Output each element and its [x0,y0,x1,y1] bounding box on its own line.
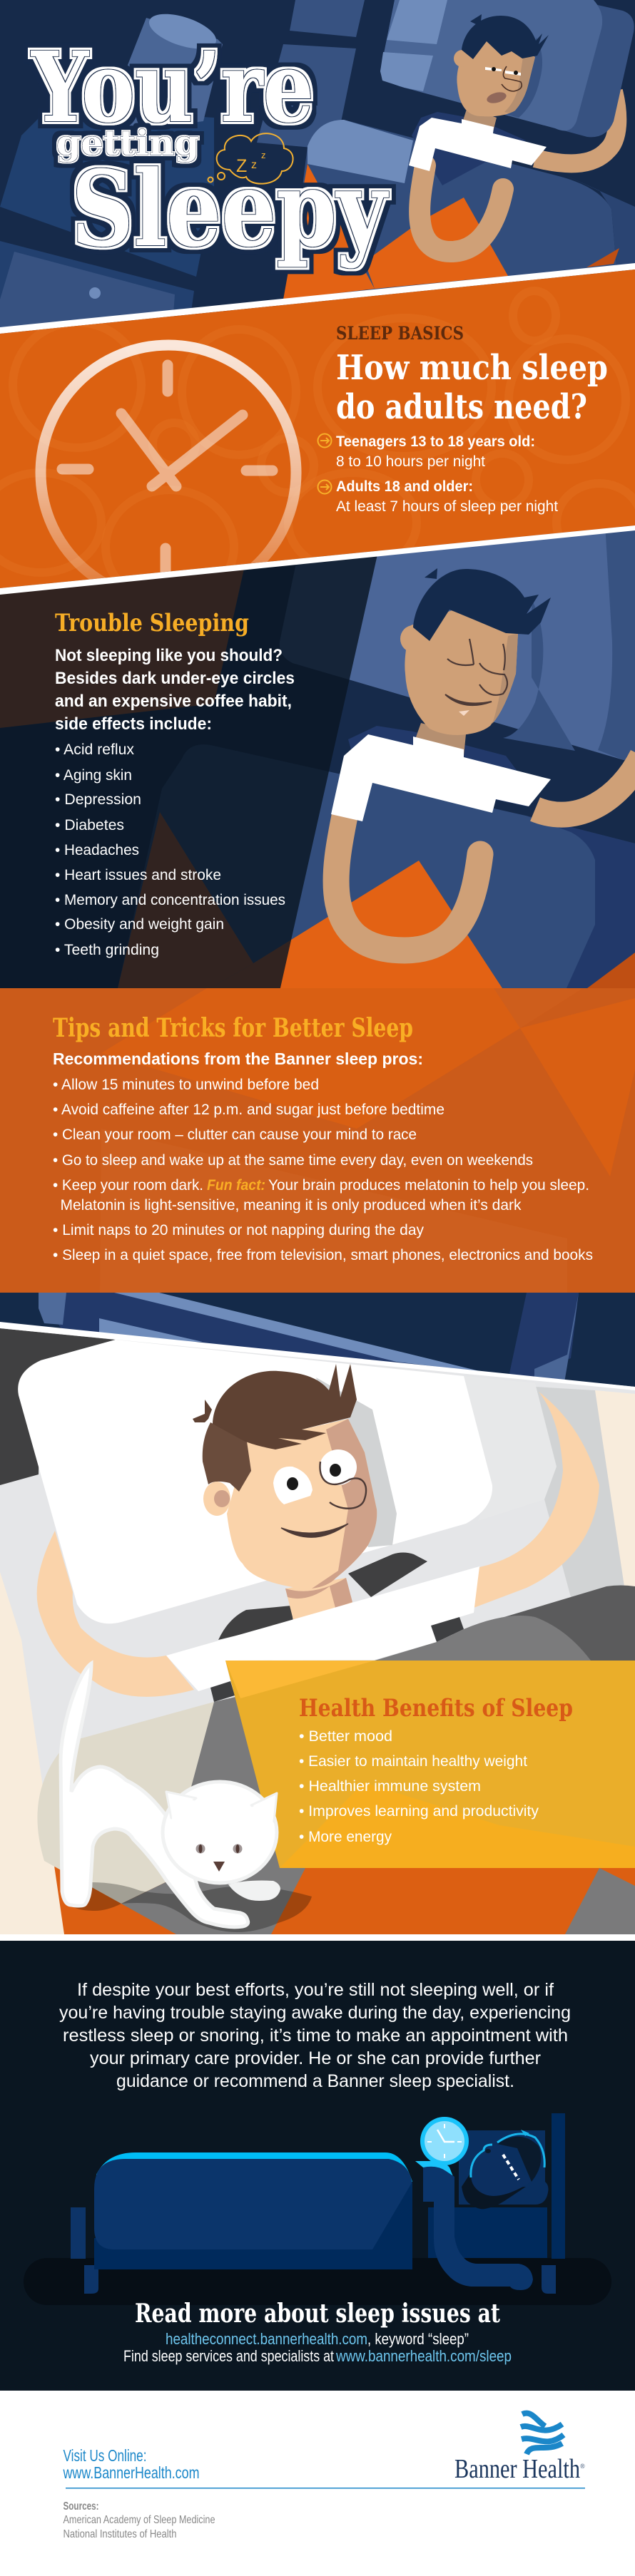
list: side effects: • Acid reflux [55,742,134,758]
list: side effects [55,742,285,958]
logo: banner health [454,2413,585,2484]
text: trouble sleeping intro [55,646,295,734]
text: sources: National Institutes of Health [63,2528,177,2540]
list: side effects: • Memory and concentration issues [55,892,285,908]
orange floor shapes [0,556,253,988]
wall shapes [0,1328,635,1934]
links text [123,2330,512,2365]
text: trouble sleeping intro: Besides dark under-eye circles [55,669,295,688]
panel: see a doctor [0,1941,635,2391]
floor [0,1572,635,1934]
heading: read more: Read more about sleep issues at [135,2299,500,2329]
collar [462,2172,526,2209]
text: see a doctor paragraph: your primary care provider. He or she can provide further [90,2048,541,2068]
list: side effects: • Headaches [55,842,139,858]
text: see a doctor paragraph: restless sleep or snoring, it’s time to make an appointment with [63,2026,568,2046]
sleep recommendation list [336,433,558,515]
head shadow [316,1377,397,1547]
pillow [280,520,635,760]
heading: trouble sleeping: Trouble Sleeping [55,609,249,637]
list: side effects: • Diabetes [55,817,124,833]
icon: arrow 1 [318,433,331,448]
sleep recommendation list: Teenagers 13 to 18 years old: [336,433,535,450]
heading: sleep basics: SLEEP BASICS [336,323,464,344]
panel: tips and tricks [0,988,635,1293]
text: trouble sleeping intro: Not sleeping like you should? [55,646,283,665]
icon: thought bubble [208,133,293,184]
sleep recommendation list: At least 7 hours of sleep per night [336,498,558,515]
list: tips [53,1077,593,1263]
title: you're sleepy [30,31,389,270]
list: tips: Your brain produces melatonin to help you sleep. [268,1177,589,1194]
list: side effects: • Heart issues and stroke [55,867,221,883]
arm [423,2167,533,2290]
clock [41,345,296,600]
list: tips: • Clean your room – clutter can cause your mind to race [53,1127,417,1143]
list: health benefits: • Improves learning and productivity [299,1803,539,1820]
text: see a doctor paragraph: you’re having trouble staying awake during the day, experiencing [59,2003,571,2023]
text: visit us online [63,2446,200,2482]
links text: www.bannerhealth.com/sleep [335,2347,512,2365]
links text: healtheconnect.bannerhealth.com [166,2330,367,2348]
text: trouble sleeping intro: side effects include: [55,714,212,734]
title: you're sleepy: Sleepy [71,148,389,270]
lamp and side table [0,7,223,277]
panel: footer [0,2391,635,2576]
title: getting: getting [56,123,199,163]
pillow [380,0,634,137]
list: tips: • Go to sleep and wake up at the same time every day, even on weekends [53,1152,533,1169]
figure: cat [61,1663,312,1932]
heading: how much sleep: do adults need? [336,387,587,427]
text: trouble sleeping intro: and an expensive coffee habit, [55,692,292,711]
list: health benefits: • Healthier immune system [299,1778,481,1795]
clock icon [420,2117,469,2165]
icon: thought bubble: Z [236,156,247,176]
blanket [283,120,635,342]
list: side effects: • Depression [55,791,141,808]
list: health benefits: • More energy [299,1829,392,1845]
panel: sleep basics band [0,263,635,604]
panel: trouble sleeping background [0,520,635,991]
list: tips: • Allow 15 minutes to unwind before bed [53,1077,319,1093]
dark overlay [0,542,380,991]
panel: hero illustration [0,0,635,342]
list: health benefits: • Better mood [299,1728,392,1745]
list: health benefits: • Easier to maintain healthy weight [299,1753,527,1770]
list: tips: • Limit naps to 20 minutes or not napping during the day [53,1222,424,1238]
pillow [18,1340,492,1623]
heading: health benefits: Health Benefits of Sleep [299,1694,573,1723]
list: tips: • Avoid caffeine after 12 p.m. and sugar just before bedtime [53,1102,444,1118]
sleep recommendation list: Adults 18 and older: [336,478,473,495]
title: you're sleepy: You’re [30,31,314,145]
figure: sleepy man [409,14,549,252]
text: sources: American Academy of Sleep Medicine [63,2514,215,2526]
list: tips: Fun fact: [207,1177,265,1194]
nightstand [0,241,194,342]
text: see a doctor paragraph [59,1980,571,2091]
list: side effects: • Aging skin [55,767,132,784]
icon: thought bubble: z [251,159,257,171]
list: tips: • Keep your room dark. [53,1177,203,1194]
logo: banner health: ® [580,2463,585,2470]
links text: Find sleep services and specialists at [123,2347,334,2365]
panel: stripes below tips [0,1293,635,1392]
text: sources [63,2500,215,2540]
figure: sleeping man [331,568,635,950]
panel: awake man scene [0,1326,635,1941]
sleep recommendation list: 8 to 10 hours per night [336,453,485,470]
heading: tips: Tips and Tricks for Better Sleep [53,1013,413,1043]
text: visit us online: www.BannerHealth.com [63,2463,200,2482]
illustration: man in bed at night [24,2113,611,2305]
white strip [0,1934,635,1941]
figure: awake man [166,1364,479,1691]
list: health benefits [299,1728,539,1845]
arm behind pillow [535,91,617,163]
head [471,2145,532,2196]
blanket [210,1586,635,1702]
text: recommendations intro: Recommendations from the Banner sleep pros: [53,1050,423,1068]
background rings [39,323,561,578]
arms [37,1392,599,1697]
logo: banner health: Banner Health [454,2454,580,2484]
yellow panel [225,1661,635,1868]
list: tips: • Sleep in a quiet space, free from television, smart phones, electronics and books [53,1247,593,1263]
text: see a doctor paragraph: guidance or recommend a Banner sleep specialist. [116,2071,514,2091]
text: visit us online: Visit Us Online: [63,2446,147,2465]
icon: arrow 2 [318,481,331,493]
text: see a doctor paragraph: If despite your best efforts, you’re still not sleeping well, or if [77,1980,554,2000]
links text: , keyword “sleep” [367,2330,469,2348]
text: sources: Sources: [63,2500,98,2513]
list: tips: Melatonin is light-sensitive, meaning it is only produced when it’s dark [60,1197,522,1213]
list: side effects: • Teeth grinding [55,942,159,958]
blanket [118,744,635,988]
window panes [257,0,365,150]
list: side effects: • Obesity and weight gain [55,916,224,933]
icon: thought bubble: z [261,150,265,160]
heading: how much sleep [336,348,608,427]
